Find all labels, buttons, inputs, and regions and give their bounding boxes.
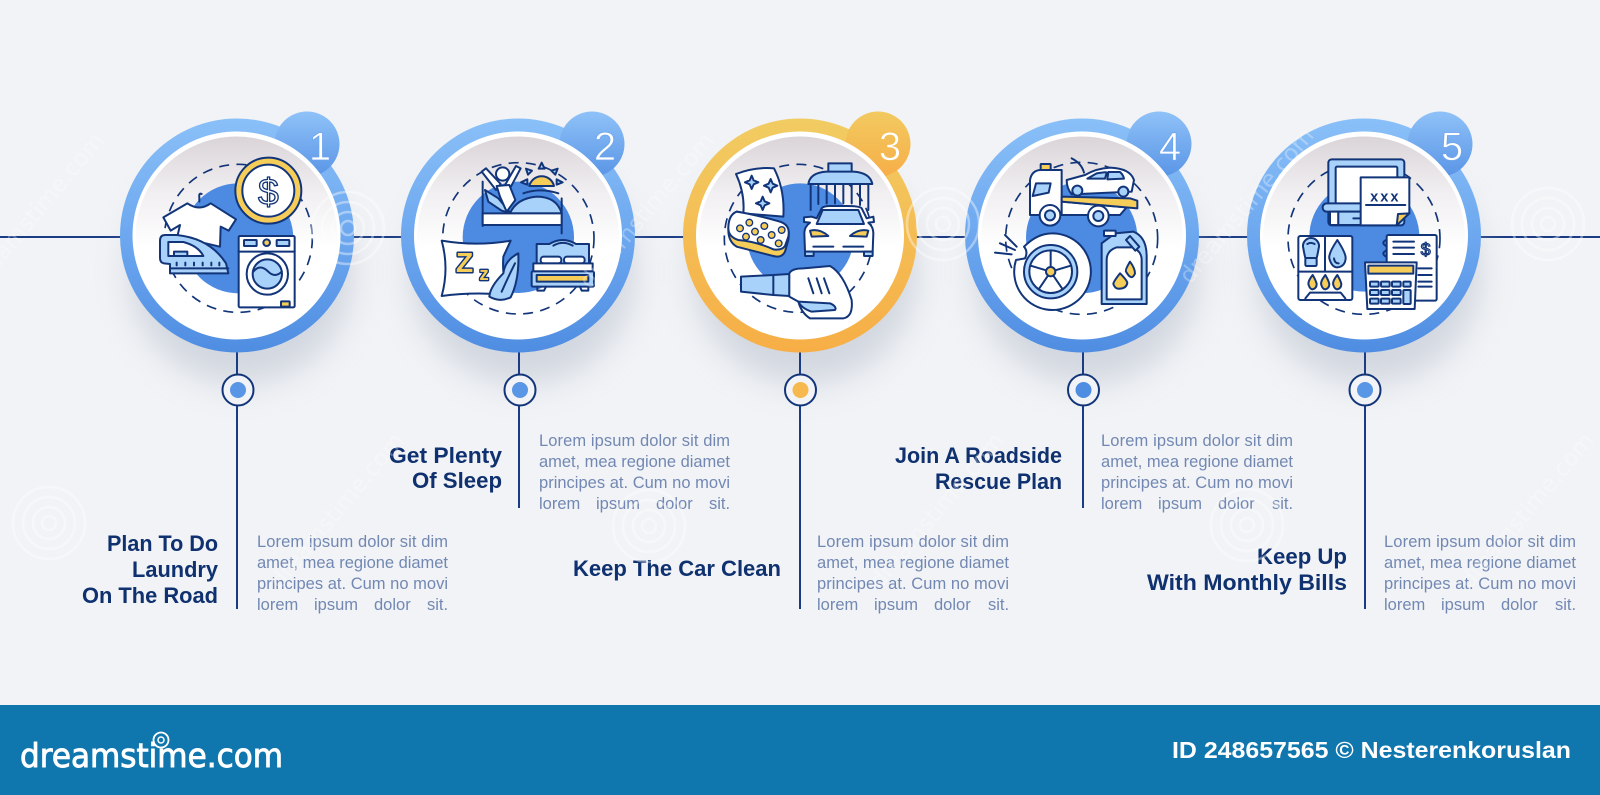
body text 3: ipsum — [874, 596, 918, 614]
circle shadow 3 — [693, 160, 917, 384]
icon: tablet, invoice, utilities, calculator: $ — [1421, 239, 1431, 259]
body text 1: amet, mea regione diamet — [257, 554, 448, 572]
body text 4: ipsum — [1158, 495, 1202, 513]
body text 1: ipsum — [314, 596, 358, 614]
heading 3: Keep The Car Clean — [573, 556, 781, 581]
step 5: keep up with monthly bills — [1147, 112, 1576, 614]
watermarks: dreamstime.com — [265, 428, 410, 594]
body text 5: sit. — [1555, 596, 1576, 614]
body text 5 — [1384, 533, 1576, 614]
body text 1: sit. — [427, 596, 448, 614]
number ring 4 — [965, 112, 1199, 352]
footer bar — [0, 705, 1600, 795]
heading 1: Laundry — [132, 557, 219, 582]
body text 2: Lorem ipsum dolor sit dim — [539, 432, 730, 450]
heading 1: On The Road — [82, 583, 218, 608]
heading 5 — [1147, 544, 1347, 595]
body text 4: amet, mea regione diamet — [1101, 453, 1293, 471]
step 4: join a roadside rescue plan — [895, 112, 1293, 513]
body text 1 — [257, 533, 448, 614]
number 3: 3 — [879, 125, 901, 169]
body text 5: dolor — [1501, 596, 1538, 614]
heading 2: Get Plenty — [389, 443, 503, 468]
heading 4: Rescue Plan — [935, 469, 1062, 494]
body text 4 — [1101, 432, 1293, 513]
timeline node 5 — [1350, 374, 1380, 406]
icon: laundry, iron, coin, washing machine: $ — [258, 170, 279, 212]
icon: waking in bed, sleep pillow, double bed: z — [479, 263, 489, 284]
connector line 2 — [518, 352, 520, 508]
body text 4: principes at. Cum no movi — [1101, 474, 1293, 492]
number 5: 5 — [1441, 125, 1463, 169]
watermarks: dreamstime.com — [1175, 123, 1320, 289]
body text 2: ipsum — [596, 495, 640, 513]
body text 3 — [817, 533, 1009, 614]
icon: tablet, invoice, utilities, calculator: xxx — [1370, 189, 1401, 205]
body text 4: Lorem ipsum dolor sit dim — [1101, 432, 1293, 450]
body text 4: lorem — [1101, 495, 1142, 513]
connector line 3 — [799, 352, 801, 609]
body text 5: amet, mea regione diamet — [1384, 554, 1576, 572]
step 3: keep the car clean — [573, 112, 1009, 614]
body text 3: lorem — [817, 596, 858, 614]
number ring 2 — [401, 112, 635, 352]
body text 2: sit. — [709, 495, 730, 513]
body text 3: sit. — [988, 596, 1009, 614]
body text 1: lorem — [257, 596, 298, 614]
body text 2: principes at. Cum no movi — [539, 474, 730, 492]
icon: tablet, invoice, utilities, calculator — [1288, 159, 1440, 314]
circle shadow 4 — [975, 160, 1199, 384]
icon: waking in bed, sleep pillow, double bed: Z — [456, 247, 473, 278]
icon: tow truck, damaged tire, oil canister — [995, 158, 1158, 314]
watermarks: dreamstime.com — [575, 128, 720, 294]
timeline axis — [0, 236, 1600, 238]
watermarks: dreamstime.com — [865, 428, 1010, 594]
body text 5: lorem — [1384, 596, 1425, 614]
body text 5: principes at. Cum no movi — [1384, 575, 1576, 593]
circle shadow 5 — [1257, 160, 1481, 384]
heading 1: Plan To Do — [107, 531, 218, 556]
heading 2 — [389, 443, 503, 493]
heading 2: Of Sleep — [412, 468, 502, 493]
body text 1: principes at. Cum no movi — [257, 575, 448, 593]
watermarks — [0, 123, 1600, 594]
timeline node 4 — [1068, 374, 1099, 406]
body text 4: sit. — [1272, 495, 1293, 513]
number ring 5 — [1247, 112, 1481, 352]
timeline node 3 — [785, 374, 816, 406]
heading 4: Join A Roadside — [895, 443, 1062, 468]
number 2: 2 — [594, 125, 616, 169]
number 4: 4 — [1159, 125, 1181, 169]
body text 3: amet, mea regione diamet — [817, 554, 1009, 572]
body text 2: lorem — [539, 495, 580, 513]
body text 1: dolor — [374, 596, 411, 614]
icon: car wash, sponge, air blower — [724, 163, 874, 318]
number 1: 1 — [309, 125, 331, 169]
body text 1: Lorem ipsum dolor sit dim — [257, 533, 448, 551]
icon: waking in bed, sleep pillow, double bed — [442, 163, 594, 314]
body text 3: Lorem ipsum dolor sit dim — [817, 533, 1009, 551]
body text 3: principes at. Cum no movi — [817, 575, 1009, 593]
circle shadow 1 — [129, 160, 353, 384]
watermarks: dreamstime.com — [1455, 428, 1600, 594]
heading 5: With Monthly Bills — [1147, 570, 1347, 595]
heading 5: Keep Up — [1257, 544, 1347, 569]
footer logo: dreamstime.com — [20, 736, 283, 775]
footer credit: ID 248657565 © Nesterenkoruslan — [1172, 737, 1571, 763]
heading 1 — [82, 531, 219, 608]
body text 4: dolor — [1218, 495, 1255, 513]
body text 2 — [539, 432, 730, 513]
connector line 4 — [1082, 352, 1084, 508]
timeline node 1 — [222, 374, 254, 406]
body text 2: dolor — [656, 495, 693, 513]
body text 3: dolor — [934, 596, 971, 614]
body text 2: amet, mea regione diamet — [539, 453, 730, 471]
connector line 5 — [1364, 352, 1366, 609]
number ring 1 — [120, 112, 354, 352]
body text 5: Lorem ipsum dolor sit dim — [1384, 533, 1576, 551]
body text 5: ipsum — [1441, 596, 1485, 614]
heading 4 — [895, 443, 1062, 494]
step 1: plan to do laundry on the road — [82, 112, 448, 614]
connector line 1 — [236, 352, 238, 609]
circle shadow 2 — [411, 160, 635, 384]
timeline node 2 — [504, 374, 536, 406]
icon: laundry, iron, coin, washing machine — [160, 158, 312, 312]
step 2: get plenty of sleep — [389, 112, 730, 513]
number ring 3 — [683, 112, 917, 352]
